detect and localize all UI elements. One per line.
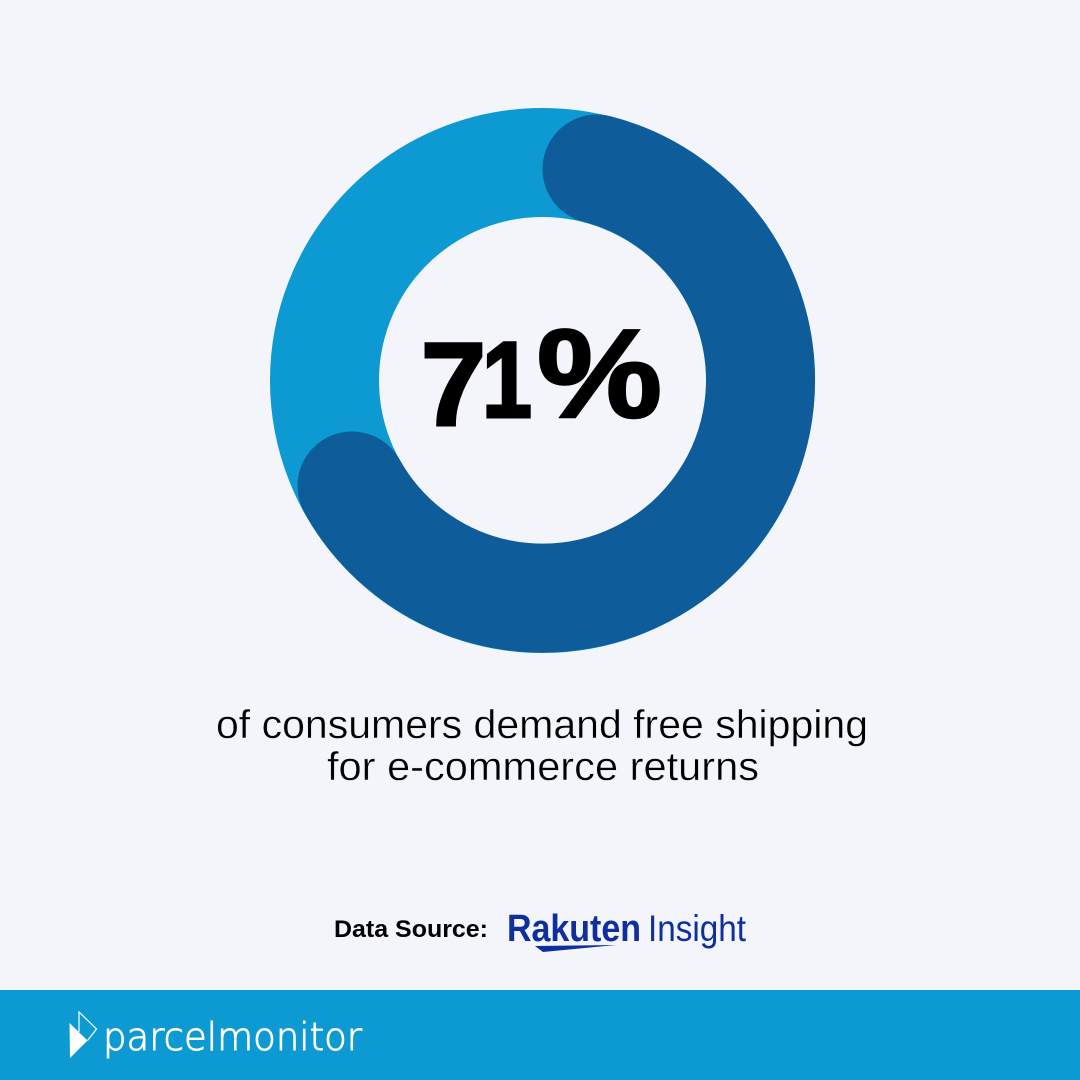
footer band [0,990,1080,1080]
logo: Rakuten Insight [507,908,747,952]
headline figure: 71% [421,303,662,451]
data source label: Data Source: [334,916,488,943]
headline figure: 71%: 1 [482,319,532,440]
logo: Rakuten Insight: Insight [648,908,747,949]
description text [216,703,868,789]
logo: Rakuten Insight: Rakuten [507,908,641,950]
Rakuten swoosh [535,945,616,952]
headline figure: 71%: 7 [421,319,486,451]
donut chart: 71% [324,162,761,598]
logo mark [70,1012,96,1058]
description text: of consumers demand free shipping [216,703,868,747]
logo: parcelmonitor [70,1012,362,1059]
logo wordmark: parcelmonitor [103,1015,362,1059]
donut value arc [352,169,761,598]
headline figure: 71%: % [537,303,662,444]
description text: for e-commerce returns [327,745,759,789]
